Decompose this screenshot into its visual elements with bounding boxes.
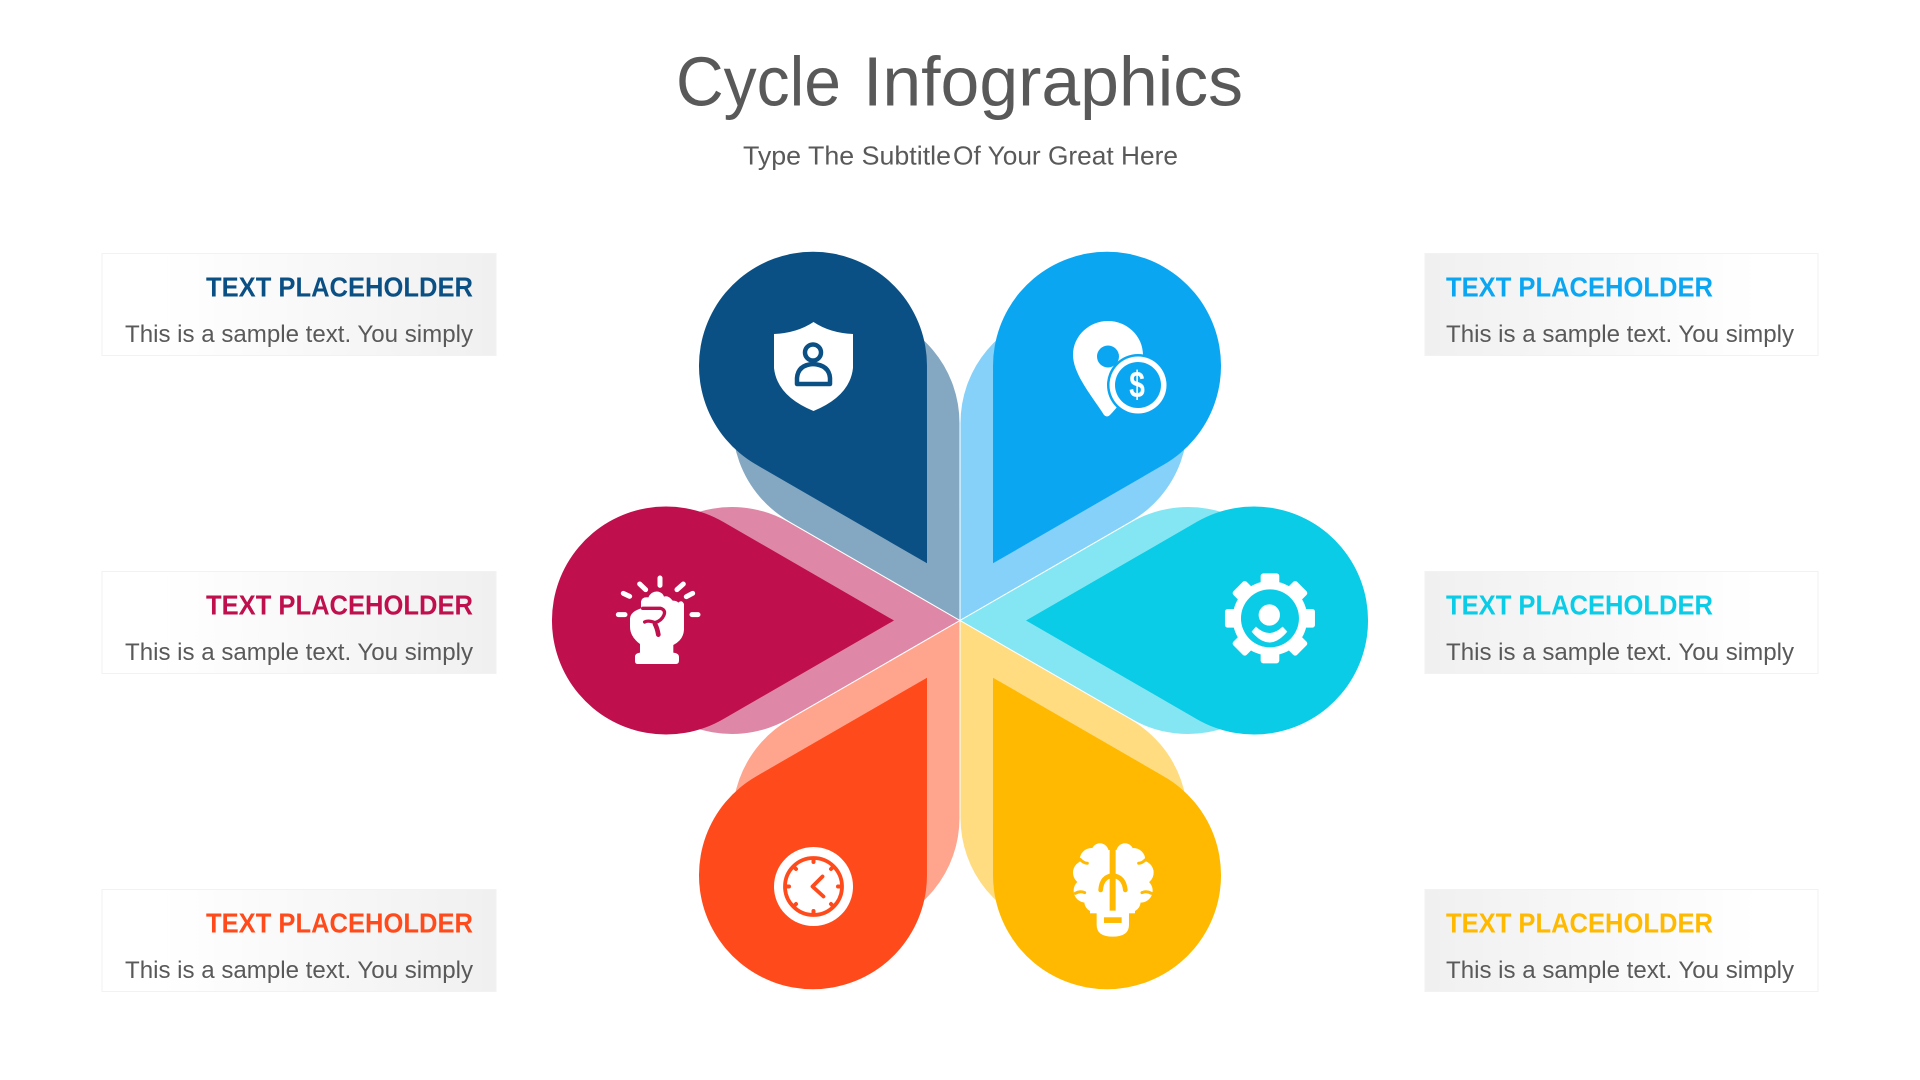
panel: text block bottom right: This is a sample text. You simply [1446, 957, 1794, 984]
panel: text block top right: TEXT PLACEHOLDER [1446, 272, 1713, 302]
petal: amber brain bulb [861, 564, 1263, 1031]
icon: clock [774, 847, 853, 926]
petal: sky blue location pin [861, 210, 1263, 678]
petal: orange clock [657, 564, 1059, 1031]
panel: text block bottom left: TEXT PLACEHOLDER [206, 908, 473, 938]
panel: text block middle right: This is a sample text. You simply [1446, 639, 1794, 666]
subtitle: Type The Subtitle [743, 140, 951, 170]
panel: text block top left [102, 254, 496, 356]
icon: shield with person [774, 322, 853, 411]
petal: magenta fist [552, 506, 960, 734]
panel: text block bottom left: This is a sample text. You simply [125, 957, 473, 984]
subtitle [743, 140, 1178, 170]
panel: text block top left: TEXT PLACEHOLDER [206, 272, 473, 302]
title: Infographics [863, 42, 1243, 120]
panel: text block middle left [102, 572, 496, 674]
panel: text block middle left: TEXT PLACEHOLDER [206, 590, 473, 620]
icon: location pin with dollar coin [1073, 321, 1169, 416]
panel: text block top right: This is a sample text. You simply [1446, 321, 1794, 348]
panel: text block bottom right [1425, 890, 1818, 992]
icon: gear with person [1225, 573, 1315, 663]
title [676, 42, 1243, 120]
panel: text block top left: This is a sample text. You simply [125, 321, 473, 348]
panel: text block bottom right: TEXT PLACEHOLDER [1446, 908, 1713, 938]
petal: dark blue shield [657, 210, 1059, 677]
icon: location pin with dollar coin: $ [1129, 363, 1145, 405]
icon: raised fist [618, 578, 698, 664]
panel: text block middle left: This is a sample text. You simply [125, 639, 473, 666]
petal: cyan gear [960, 506, 1368, 734]
subtitle: Of Your Great Here [953, 140, 1178, 170]
title: Cycle [676, 42, 841, 120]
panel: text block bottom left [102, 890, 496, 992]
panel: text block middle right: TEXT PLACEHOLDER [1446, 590, 1713, 620]
icon: brain light bulb [1073, 842, 1154, 937]
panel: text block top right [1425, 254, 1818, 356]
panel: text block middle right [1425, 572, 1818, 674]
